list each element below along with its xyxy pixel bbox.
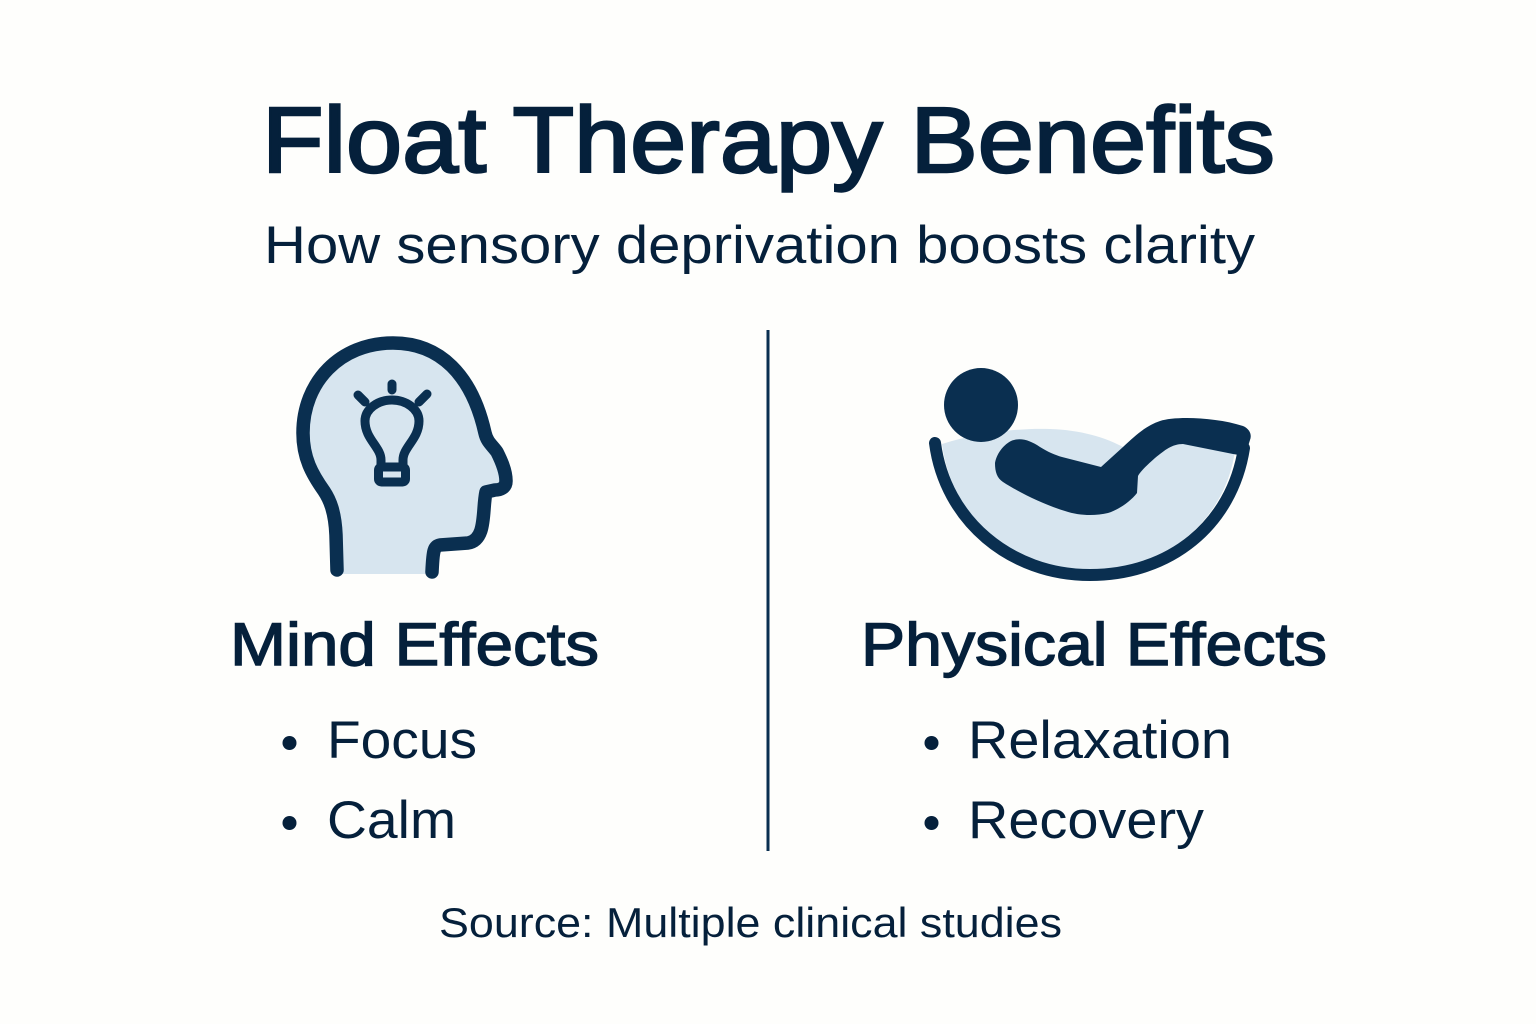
list: mind effects: Focus <box>327 711 477 770</box>
icon: floating person <box>935 368 1251 575</box>
source note: Source: Multiple clinical studies <box>439 899 1062 946</box>
list: physical effects: Recovery <box>968 791 1205 850</box>
list: mind effects: Calm <box>327 791 456 850</box>
heading: physical effects: Physical Effects <box>861 611 1327 678</box>
list: physical effects <box>924 711 1232 850</box>
icon: light bulb <box>358 384 427 482</box>
divider <box>766 330 770 851</box>
icon: head with light bulb <box>303 343 506 574</box>
title: Float Therapy Benefits <box>262 88 1275 192</box>
list: mind effects <box>282 711 477 850</box>
subtitle: How sensory deprivation boosts clarity <box>264 216 1256 275</box>
heading: mind effects: Mind Effects <box>230 611 599 678</box>
list: physical effects: Relaxation <box>968 711 1232 770</box>
